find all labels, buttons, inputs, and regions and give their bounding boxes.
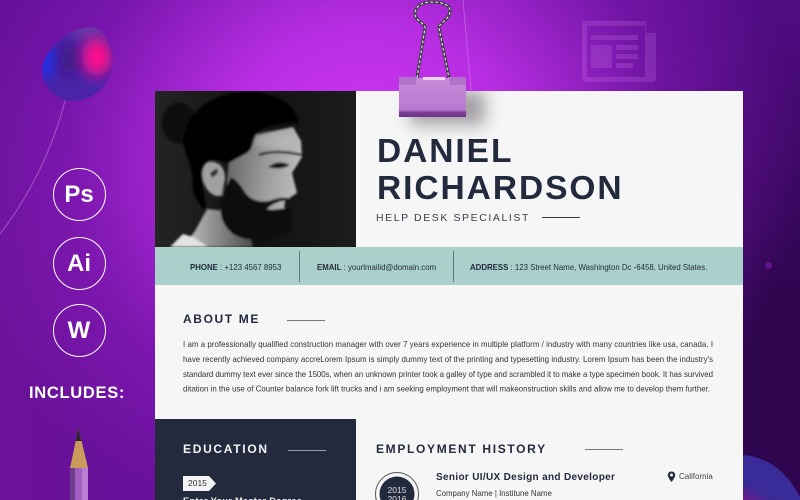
- about me paragraph: standard dummy text ever since the 1500s, when an unknown printer took a galley of type and scrambled it to make a type specimen book. It has survived: [183, 370, 713, 379]
- year badge: [375, 472, 419, 500]
- name heading: RICHARDSON: [377, 170, 624, 207]
- name heading: DANIEL: [377, 133, 513, 170]
- includes label: INCLUDES:: [29, 384, 125, 402]
- icon: Illustrator: Ai: [67, 250, 91, 277]
- panel: resume page: [155, 91, 743, 500]
- icon: Photoshop: Ps: [64, 181, 94, 208]
- icon: Word: W: [68, 317, 90, 344]
- about me paragraph: I am a professionally qualified construction manager with over 7 years experience in multiple platform / industry with many countries like usa, canada. I: [183, 340, 713, 349]
- portrait figure: [162, 92, 302, 247]
- icon: Illustrator: [52, 237, 106, 290]
- name heading: [377, 133, 624, 207]
- icon: Word: [52, 304, 106, 357]
- about me paragraph: have recently achieved company accreLorem Ipsum is simply dummy text of the printing and typesetting industry. Lorem Ipsum has been the industry's: [183, 355, 713, 364]
- about me heading: ABOUT ME: [183, 312, 260, 326]
- year tag: 2015: [188, 478, 207, 488]
- employment heading: EMPLOYMENT HISTORY: [376, 442, 547, 456]
- icon: newspaper watermark: [582, 21, 656, 82]
- job title: HELP DESK SPECIALIST: [376, 212, 530, 224]
- icon: pencil: [70, 428, 88, 500]
- education heading: EDUCATION: [183, 442, 269, 456]
- phone: PHONE : +123 4567 8953: [190, 263, 281, 272]
- company: Company Name | Institune Name: [436, 489, 552, 498]
- clip shadow: [410, 91, 485, 125]
- icon: location pin: [668, 472, 676, 482]
- job title: Senior UI/UX Design and Developer: [436, 472, 615, 483]
- decorative balloon with string: [0, 27, 113, 234]
- about me paragraph: ditation in the use of Counter balance fork lift trucks and i am seeking employment that will makeonstruction skills and allow me to develop them further.: [183, 384, 710, 394]
- icon: Photoshop: [52, 168, 106, 221]
- decorative blob bottom right: [743, 455, 800, 500]
- year badge: 2015: [388, 485, 407, 495]
- year tag: [183, 476, 216, 491]
- icon: binder clip: [399, 0, 466, 117]
- contact band: [155, 247, 743, 285]
- photo portrait: [155, 91, 356, 247]
- about me paragraph: [183, 340, 713, 394]
- location: California: [679, 472, 713, 481]
- address: ADDRESS : 123 Street Name, Washington Dc -6458, United States.: [470, 263, 707, 272]
- email: EMAIL : yourlmailid@domain.com: [317, 263, 436, 272]
- panel: education: [155, 419, 356, 500]
- decorative string: [462, 0, 472, 90]
- decorative dot: [765, 262, 772, 269]
